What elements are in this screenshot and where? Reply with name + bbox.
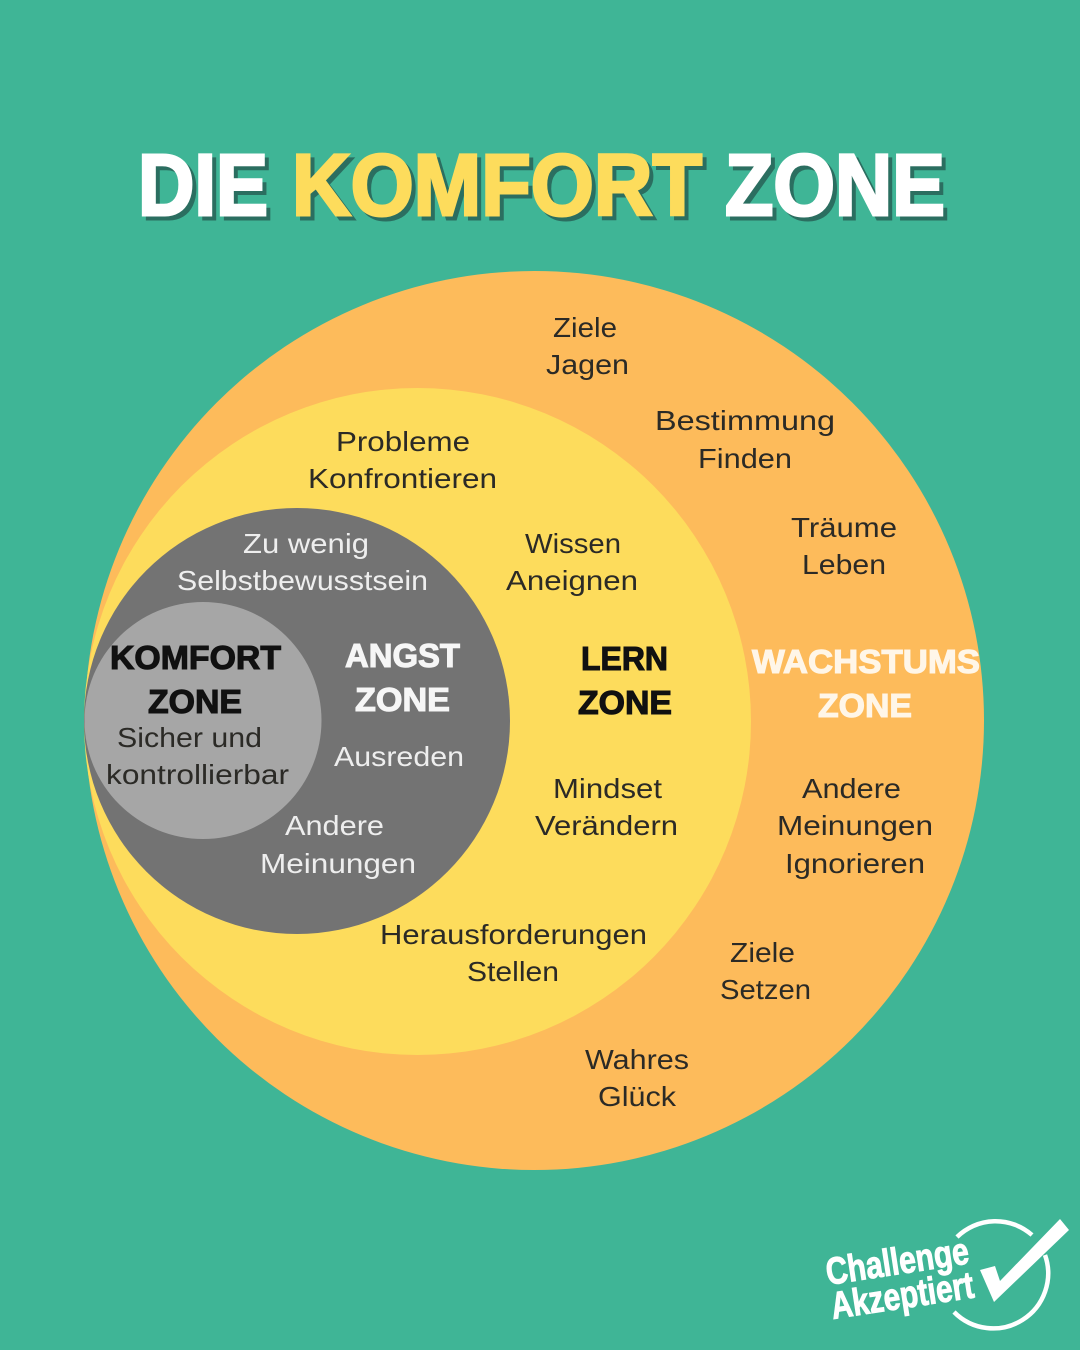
labels: Lernzone: Wissen bbox=[525, 528, 621, 559]
labels: Wachstumszone: Wahres bbox=[585, 1044, 689, 1075]
logo check mark bbox=[980, 1219, 1069, 1302]
labels: Wachstumszone: Leben bbox=[802, 549, 886, 580]
circle: Angstzone bbox=[84, 508, 510, 934]
labels: Lernzone: Mindset bbox=[553, 773, 662, 804]
labels: Wachstumszone: Ziele bbox=[553, 312, 617, 343]
labels: Komfortzone: KOMFORT bbox=[110, 639, 281, 676]
labels: Wachstumszone: Andere bbox=[802, 773, 901, 804]
labels: Lernzone: Stellen bbox=[467, 956, 559, 987]
labels: Wachstumszone: WACHSTUMS bbox=[752, 643, 980, 680]
logo text bbox=[823, 1231, 977, 1328]
logo text: Challenge bbox=[823, 1231, 972, 1294]
labels: Lernzone: LERN bbox=[581, 640, 668, 677]
labels: Lernzone: Probleme bbox=[336, 426, 470, 457]
labels: Angstzone bbox=[177, 528, 464, 879]
labels: Angstzone: Meinungen bbox=[260, 848, 416, 879]
labels: Komfortzone: ZONE bbox=[148, 683, 242, 720]
labels: Komfortzone: kontrollierbar bbox=[106, 759, 289, 790]
nested circle diagram bbox=[84, 271, 984, 1170]
title: ZONE bbox=[729, 141, 949, 238]
labels: Wachstumszone: ZONE bbox=[818, 687, 912, 724]
labels: Wachstumszone: Träume bbox=[791, 512, 897, 543]
labels: Angstzone: ZONE bbox=[355, 681, 450, 718]
labels: Komfortzone bbox=[106, 639, 289, 790]
labels: Lernzone: Konfrontieren bbox=[308, 463, 497, 494]
logo: Challenge Akzeptiert bbox=[823, 1219, 1069, 1328]
circle: Wachstumszone bbox=[85, 271, 984, 1170]
circle: Komfortzone bbox=[84, 602, 322, 839]
labels: Wachstumszone: Setzen bbox=[720, 974, 811, 1005]
labels: Komfortzone: Sicher und bbox=[117, 722, 262, 753]
title: KOMFORT bbox=[292, 137, 702, 234]
labels: Angstzone: Ausreden bbox=[334, 741, 464, 772]
title: KOMFORT bbox=[296, 141, 706, 238]
labels: Angstzone: Andere bbox=[285, 810, 384, 841]
logo ring bbox=[954, 1221, 1048, 1328]
labels: Lernzone: Verändern bbox=[535, 810, 678, 841]
labels: Wachstumszone: Jagen bbox=[546, 349, 629, 380]
labels: Lernzone: Aneignen bbox=[506, 565, 638, 596]
labels: Lernzone: ZONE bbox=[578, 684, 672, 721]
title: DIE bbox=[142, 141, 272, 238]
labels: Wachstumszone: Ziele bbox=[730, 937, 795, 968]
title: ZONE bbox=[725, 137, 945, 234]
labels: Angstzone: Zu wenig bbox=[243, 528, 369, 559]
labels: Wachstumszone bbox=[546, 312, 980, 1112]
labels: Lernzone: Herausforderungen bbox=[380, 919, 647, 950]
labels: Wachstumszone: Glück bbox=[598, 1081, 677, 1112]
labels: Wachstumszone: Ignorieren bbox=[785, 848, 925, 879]
labels: Wachstumszone: Bestimmung bbox=[655, 405, 835, 436]
labels: Angstzone: ANGST bbox=[345, 637, 460, 674]
circle: Lernzone bbox=[84, 388, 751, 1055]
labels: Wachstumszone: Finden bbox=[698, 443, 792, 474]
labels: Wachstumszone: Meinungen bbox=[777, 810, 933, 841]
labels: Lernzone bbox=[308, 426, 678, 987]
title: DIE bbox=[138, 137, 268, 234]
labels: Angstzone: Selbstbewusstsein bbox=[177, 565, 428, 596]
title bbox=[138, 137, 949, 238]
logo text: Akzeptiert bbox=[828, 1265, 977, 1328]
